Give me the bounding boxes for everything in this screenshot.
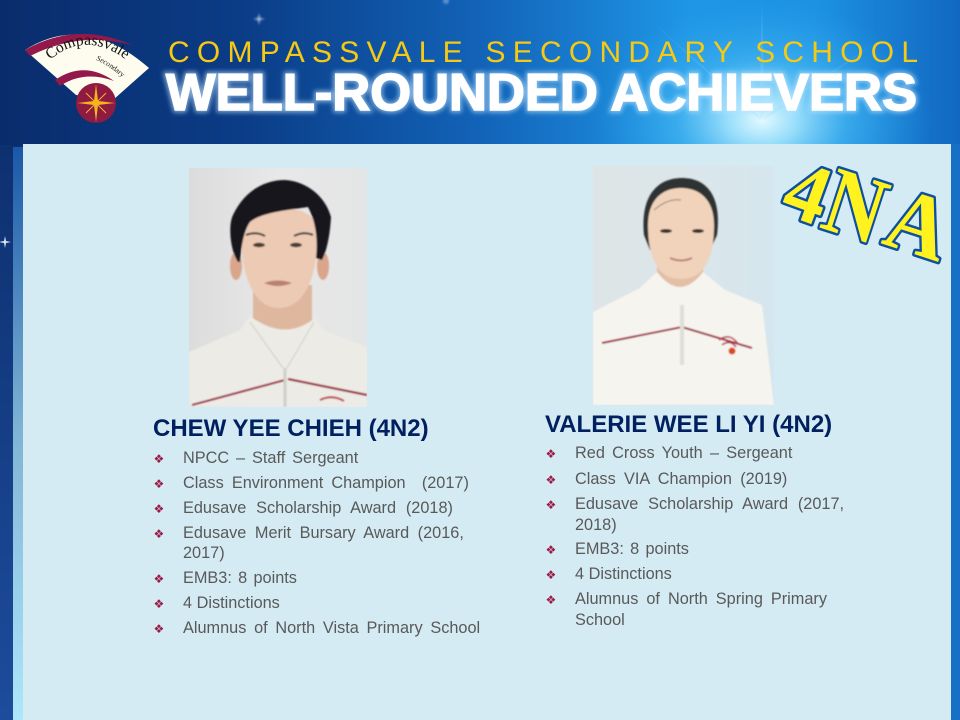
name heading: VALERIE WEE LI YI (4N2) [545,411,832,438]
achievements list: ❖ [546,473,556,487]
main panel [23,144,951,720]
achievements list: ❖ [546,498,556,512]
achievements list: EMB3: 8 points [183,569,297,587]
achievements list: Edusave Scholarship Award (2018) [183,499,453,517]
achievements list: Red Cross Youth – Sergeant [575,444,793,462]
student: Chew Yee Chieh [153,415,480,637]
achievements list: Edusave Scholarship Award (2017, [575,495,844,513]
class label: 4NA: 4 [772,142,844,244]
achievements list: Alumnus of North Vista Primary School [183,619,480,637]
logo [25,34,149,123]
achievements list: ❖ [154,452,164,466]
title: well-rounded achievers: WELL-ROUNDED ACHIEVERS [166,64,917,122]
achievements list: NPCC – Staff Sergeant [183,449,359,467]
achievements list [546,444,844,629]
achievements list: ❖ [546,543,556,557]
class label: 4NA [772,142,960,281]
achievements list: ❖ [154,572,164,586]
achievements list: Class VIA Champion (2019) [575,470,787,488]
achievements list [154,449,480,637]
name heading: CHEW YEE CHIEH (4N2) [153,415,429,442]
photo: Chew Yee Chieh [189,168,367,407]
achievements list: ❖ [546,568,556,582]
achievements list: ❖ [154,622,164,636]
title: well-rounded achievers: WELL-ROUNDED ACHIEVERS [166,64,917,122]
achievements list: Edusave Merit Bursary Award (2016, [183,524,464,542]
achievements list: ❖ [154,527,164,541]
achievements list: Class Environment Champion (2017) [183,474,469,492]
achievements list: EMB3: 8 points [575,540,689,558]
logo: Compassvale [46,38,128,58]
achievements list: 2018) [575,516,617,534]
logo: Secondary [96,56,124,77]
header background [0,0,960,240]
achievements list: School [575,611,625,629]
achievements list: Alumnus of North Spring Primary [575,590,828,608]
photo: Valerie Wee Li Yi [593,166,774,405]
student: Valerie Wee Li Yi [545,411,844,629]
achievements list: 4 Distinctions [575,565,672,583]
achievements list: ❖ [154,597,164,611]
title: school name: COMPASSVALE SECONDARY SCHOOL [168,36,918,69]
achievements list: ❖ [546,593,556,607]
achievements list: ❖ [546,447,556,461]
achievements list: 4 Distinctions [183,594,280,612]
background strips around panel [0,144,960,720]
achievements list: ❖ [154,502,164,516]
class label: 4NA: N [811,147,899,266]
achievements list: ❖ [154,477,164,491]
achievements list: 2017) [183,544,225,562]
